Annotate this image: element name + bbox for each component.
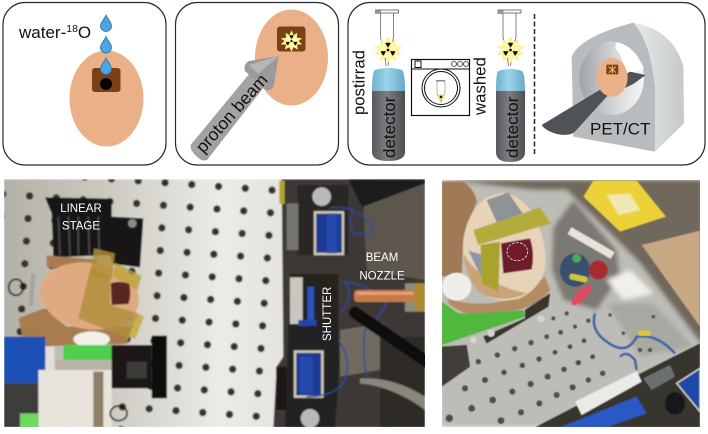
dashed embryo outline	[507, 243, 528, 261]
tube: washed	[498, 10, 524, 66]
label: PET/CT: PET/CT	[590, 120, 650, 138]
label: LINEAR STAGE: STAGE	[62, 220, 100, 232]
screw post	[29, 274, 35, 306]
perforated plate holes	[446, 311, 655, 424]
label: water-18O: 18	[66, 23, 78, 35]
panel: water injection	[3, 2, 166, 165]
shutter foreground	[535, 343, 700, 427]
bottom bracket	[285, 325, 339, 427]
label: LINEAR STAGE: LINEAR	[60, 203, 102, 215]
shutter body	[288, 274, 338, 327]
label: washed: washed	[470, 57, 490, 116]
shutter assembly and nozzle	[273, 179, 427, 428]
copper nozzle	[354, 283, 425, 311]
yellow tape strip	[279, 181, 285, 204]
egg window	[111, 282, 130, 305]
panel: detection and imaging	[348, 2, 705, 165]
egg carton	[18, 255, 133, 347]
bottom screw	[301, 409, 319, 428]
egg window	[92, 68, 120, 92]
scanner table	[542, 72, 646, 135]
wires	[307, 207, 387, 397]
dashed divider	[534, 14, 536, 155]
label: detector: detector	[380, 96, 399, 158]
cotton	[73, 331, 110, 347]
egg window with irradiated embryo	[277, 26, 306, 52]
beam nozzle	[191, 56, 278, 160]
wooden block	[642, 231, 700, 327]
marker circles	[9, 279, 127, 421]
detector: postirradiation	[372, 68, 405, 161]
electronics	[560, 227, 615, 308]
label: SHUTTER: SHUTTER	[322, 287, 334, 341]
embryo	[100, 78, 112, 90]
detector: washed	[496, 69, 525, 162]
top screw	[312, 187, 331, 206]
stepper motor	[112, 336, 167, 398]
yellow box	[583, 181, 666, 232]
white block	[38, 370, 112, 427]
panel: proton beam	[176, 2, 338, 165]
top bracket	[297, 185, 348, 255]
egg	[39, 262, 140, 330]
label: water-18O: O	[78, 23, 91, 42]
washing machine	[412, 60, 470, 116]
perforated plate	[4, 179, 284, 427]
label: detector: detector	[503, 96, 522, 158]
gray tape	[487, 193, 523, 226]
black cable	[355, 313, 427, 362]
yellow connector	[638, 331, 651, 336]
egg	[255, 10, 328, 106]
shutter rod	[297, 285, 318, 328]
label: BEAM NOZZLE: BEAM	[366, 252, 398, 264]
kapton tape	[78, 248, 144, 339]
green mount	[62, 344, 113, 361]
label: proton beam: proton beam	[192, 70, 272, 157]
PET/CT scanner	[542, 23, 684, 152]
tube: postirradiation	[375, 10, 401, 66]
egg carton	[442, 182, 550, 318]
photo: egg close-up on plate	[440, 179, 703, 427]
photo: egg on linear stage and beam nozzle	[4, 179, 427, 428]
blue block	[4, 337, 45, 383]
label: postirrad: postirrad	[350, 50, 368, 115]
egg	[463, 193, 551, 300]
egg in scanner	[596, 58, 628, 97]
yellow tape	[473, 208, 551, 245]
blue wires	[594, 313, 675, 370]
bottom solenoid	[295, 352, 322, 397]
label: BEAM NOZZLE: NOZZLE	[359, 270, 405, 282]
blurred background	[440, 179, 703, 427]
green mount and base	[442, 293, 550, 387]
dark base	[4, 383, 38, 427]
water drops	[100, 15, 112, 74]
egg window	[501, 238, 533, 273]
top solenoid	[315, 212, 343, 254]
label: water-18O: water-	[19, 23, 66, 42]
linear stage	[45, 197, 143, 267]
cotton	[442, 273, 471, 301]
egg	[70, 50, 144, 146]
